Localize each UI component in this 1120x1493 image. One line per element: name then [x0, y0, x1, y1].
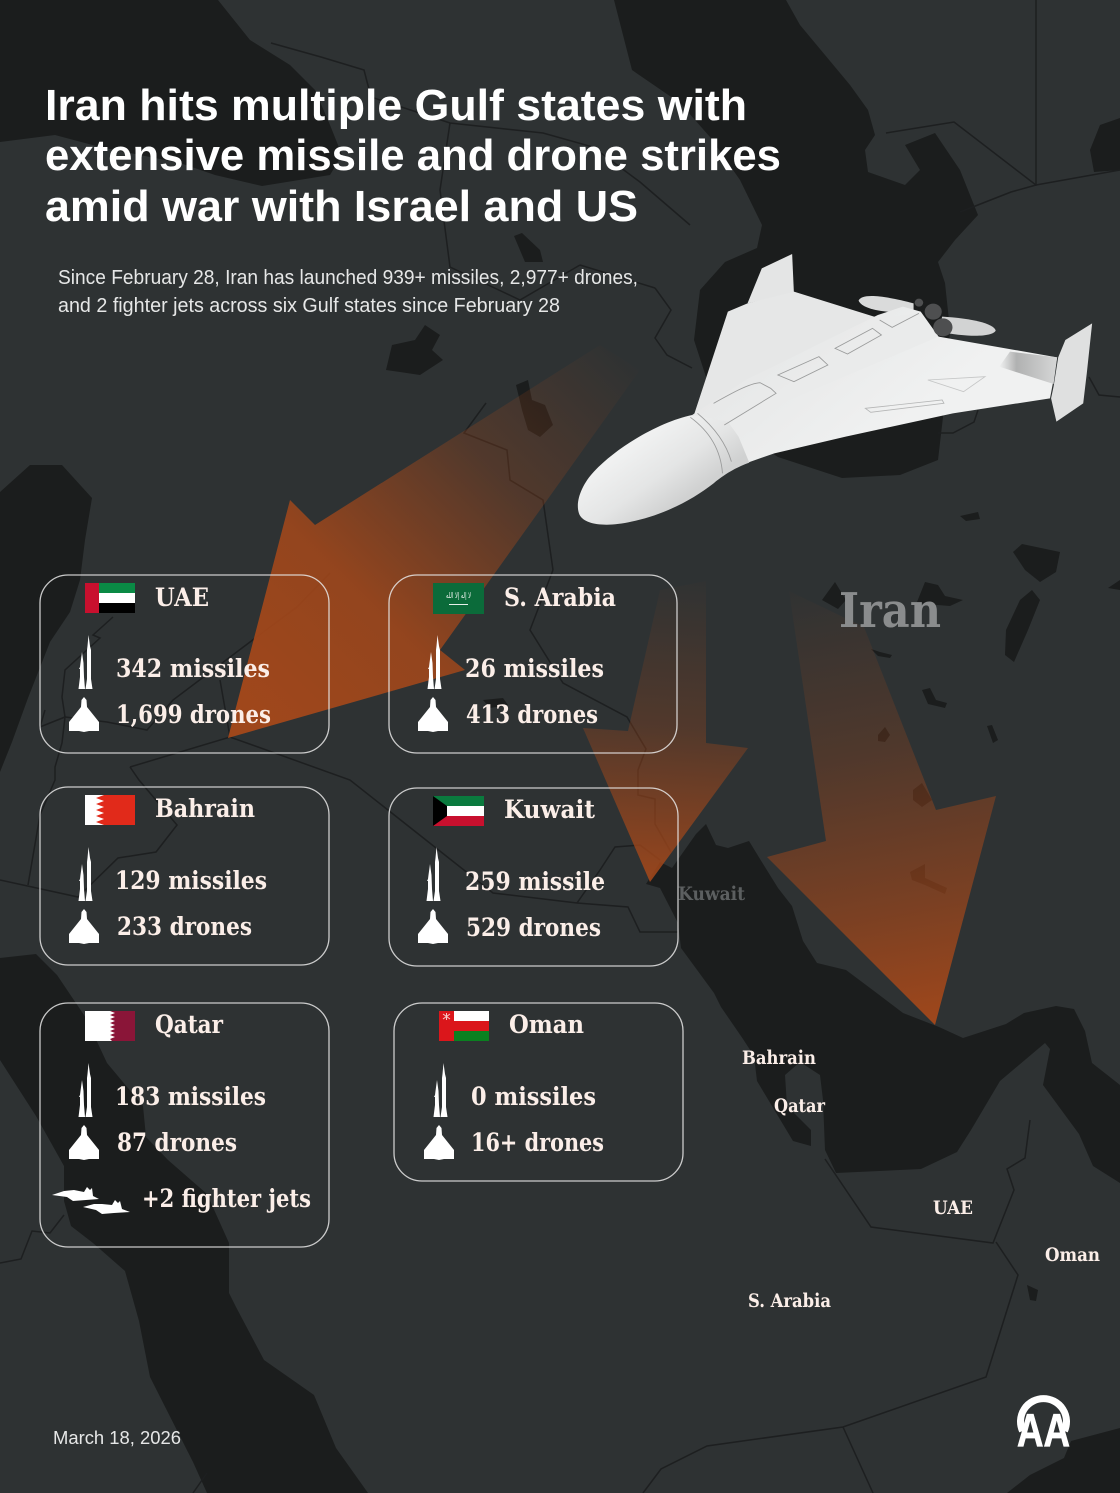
panel lines — [690, 313, 985, 473]
motor — [915, 299, 952, 336]
mediterranean — [0, 465, 92, 772]
stat: fighter jets: +2 fighter jets — [142, 1184, 311, 1213]
stat: drones: 529 drones — [466, 913, 601, 942]
heading: Kuwait: Kuwait — [504, 795, 595, 824]
flag: Oman — [439, 1011, 489, 1041]
flag: UAE — [85, 583, 135, 613]
black sea — [0, 0, 342, 186]
panel: UAE — [40, 575, 329, 753]
subtitle: Since February 28, Iran has launched 939+ missiles, 2,977+ drones, — [58, 267, 638, 289]
heading: Oman: Oman — [509, 1010, 584, 1039]
stat: drones: 1,699 drones — [116, 700, 271, 729]
date: March 18, 2026 — [53, 1428, 181, 1448]
subtitle: and 2 fighter jets across six Gulf states since February 28 — [58, 295, 560, 317]
stat: missiles: 129 missiles — [115, 866, 267, 895]
map labels — [678, 583, 1100, 1312]
stat: drones: 16+ drones — [471, 1128, 604, 1157]
icon: drone — [418, 697, 448, 732]
flag: Kuwait — [433, 796, 484, 826]
arrow: strike toward Kuwait — [583, 581, 748, 882]
subtitle — [58, 267, 638, 317]
right tail fin — [1051, 323, 1092, 422]
stat: missiles: 0 missiles — [471, 1082, 596, 1111]
lakes — [386, 233, 1120, 1301]
stat: drones: 87 drones — [117, 1128, 237, 1157]
aral sea — [1090, 118, 1120, 172]
heading: Qatar: Qatar — [155, 1010, 224, 1039]
map labels: Kuwait — [678, 883, 745, 905]
arrow: strike toward west — [228, 345, 640, 738]
title: extensive missile and drone strikes — [45, 131, 781, 180]
icon: missiles — [426, 847, 440, 901]
heading: UAE: UAE — [155, 583, 209, 612]
nose — [578, 415, 749, 525]
left tail fin — [747, 254, 794, 303]
flag: Saudi Arabia — [433, 583, 484, 614]
icon: drone — [69, 909, 99, 944]
red sea — [0, 954, 368, 1493]
persian gulf — [646, 824, 1120, 1183]
panel: Bahrain — [40, 787, 329, 965]
stat: missiles: 259 missile — [465, 867, 605, 896]
map labels: Qatar — [774, 1095, 826, 1117]
arabian sea — [1007, 1428, 1120, 1493]
icon: missiles — [78, 635, 92, 689]
icon: missiles — [78, 847, 92, 901]
flag: Saudi Arabia: لا إله إلا الله — [446, 591, 471, 601]
icon: missiles — [434, 1063, 448, 1117]
flag: Qatar — [85, 1011, 135, 1041]
title: Iran hits multiple Gulf states with — [45, 81, 747, 130]
icon: drone — [424, 1125, 454, 1160]
icon: drone — [69, 1125, 99, 1160]
heading: S. Arabia: S. Arabia — [504, 583, 616, 612]
heading: Bahrain: Bahrain — [155, 794, 255, 823]
title: amid war with Israel and US — [45, 182, 638, 231]
map labels: UAE — [933, 1197, 973, 1219]
icon: missiles — [428, 635, 442, 689]
map labels: Iran — [839, 583, 941, 639]
stat: missiles: 26 missiles — [465, 654, 604, 683]
panel: Kuwait — [389, 788, 678, 966]
fuselage ridge — [724, 313, 939, 432]
title — [45, 81, 781, 231]
stat: drones: 413 drones — [466, 700, 598, 729]
map labels: Oman — [1045, 1244, 1100, 1266]
map labels: Bahrain — [742, 1047, 816, 1069]
right propeller blade — [939, 317, 996, 336]
caspian sea — [614, 0, 978, 478]
panel: Oman — [394, 1003, 683, 1181]
stat: drones: 233 drones — [117, 912, 252, 941]
icon: drone — [69, 697, 99, 732]
stat: missiles: 183 missiles — [115, 1082, 266, 1111]
icon: missiles — [78, 1063, 92, 1117]
drone illustration — [578, 254, 1092, 525]
icon: drone — [418, 909, 448, 944]
tail shadow — [999, 352, 1057, 384]
flag: Bahrain — [85, 795, 135, 825]
icon: fighter jets — [52, 1187, 130, 1214]
right wing and fuselage — [692, 307, 1057, 463]
map labels: S. Arabia — [748, 1290, 831, 1312]
logo: Anadolu Agency: AA — [1017, 1404, 1070, 1456]
stat: missiles: 342 missiles — [116, 654, 270, 683]
left propeller blade — [859, 296, 914, 312]
panel: S. Arabia — [389, 575, 677, 753]
panel: Qatar — [40, 1003, 329, 1247]
left wing — [694, 292, 880, 415]
arrow: strike toward the Gulf — [767, 591, 996, 1025]
